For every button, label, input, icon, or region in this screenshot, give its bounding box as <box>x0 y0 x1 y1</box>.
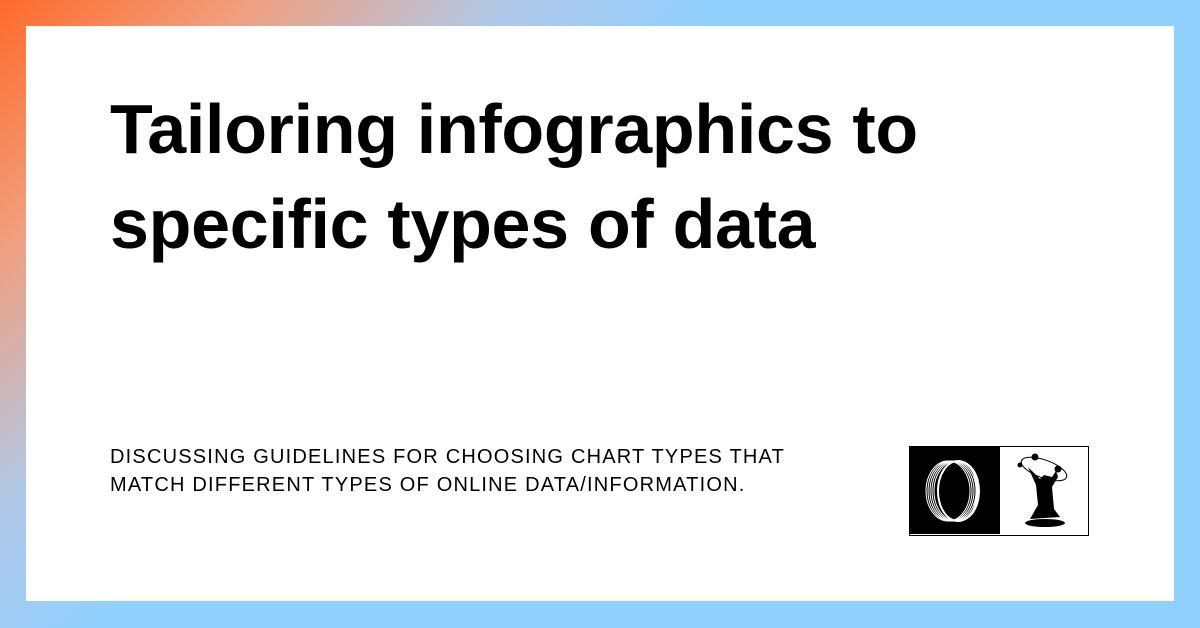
title <box>110 90 918 263</box>
title: Tailoring infographics to <box>110 90 918 168</box>
icon: juggler figure <box>1018 454 1068 527</box>
subtitle: DISCUSSING GUIDELINES FOR CHOOSING CHART TYPES THAT <box>110 446 785 468</box>
subtitle <box>110 446 785 496</box>
logo <box>909 446 1089 536</box>
icon: O mark <box>910 447 1000 534</box>
title: specific types of data <box>110 185 815 263</box>
subtitle: MATCH DIFFERENT TYPES OF ONLINE DATA/INFORMATION. <box>110 474 746 496</box>
